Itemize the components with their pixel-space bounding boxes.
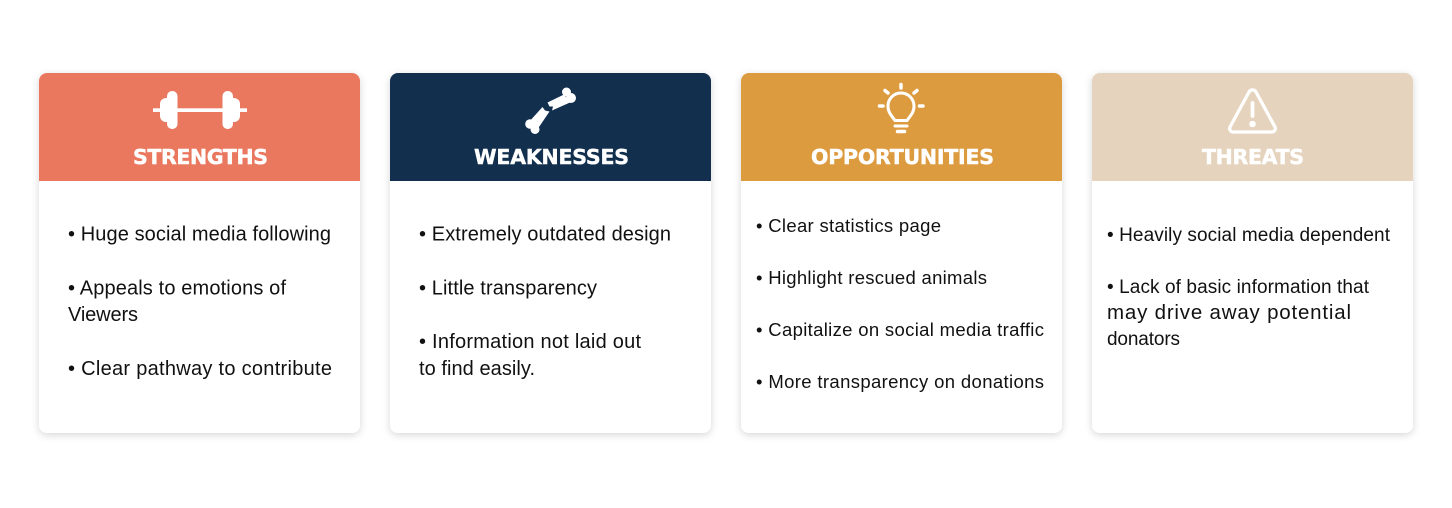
list: threats bbox=[1107, 225, 1391, 350]
list: strengths: • Appeals to emotions of bbox=[68, 278, 286, 300]
list: opportunities: • Highlight rescued animals bbox=[756, 267, 987, 288]
list: weaknesses: • Little transparency bbox=[419, 278, 597, 300]
list: weaknesses: • Information not laid out bbox=[419, 331, 641, 353]
heading: threats: THREATS bbox=[1202, 145, 1304, 169]
list: strengths: • Huge social media following bbox=[68, 224, 331, 246]
list: opportunities: • Clear statistics page bbox=[756, 215, 941, 236]
header: weaknesses bbox=[390, 73, 711, 181]
heading: opportunities: OPPORTUNITIES bbox=[811, 145, 994, 169]
heading: weaknesses: WEAKNESSES bbox=[474, 145, 629, 169]
panel: strengths bbox=[39, 73, 360, 433]
header: opportunities bbox=[741, 73, 1062, 181]
list: threats: may drive away potential bbox=[1107, 301, 1351, 324]
list: threats: • Heavily social media dependent bbox=[1107, 225, 1391, 246]
header: threats bbox=[1092, 73, 1413, 181]
list: strengths: Viewers bbox=[68, 304, 138, 326]
panel: weaknesses bbox=[390, 73, 711, 433]
panel: threats bbox=[1092, 73, 1413, 433]
heading: strengths: STRENGTHS bbox=[133, 145, 268, 169]
panel: opportunities bbox=[741, 73, 1062, 433]
list: weaknesses: • Extremely outdated design bbox=[419, 224, 671, 246]
icon: warning triangle bbox=[1230, 90, 1275, 132]
list: weaknesses: to find easily. bbox=[419, 358, 535, 380]
icon: broken bone bbox=[525, 88, 576, 134]
icon: light bulb bbox=[880, 84, 923, 132]
list: strengths: • Clear pathway to contribute bbox=[68, 358, 332, 380]
icon: barbell bbox=[153, 91, 247, 129]
list: opportunities: • Capitalize on social media traffic bbox=[756, 319, 1044, 340]
list: opportunities bbox=[756, 215, 1044, 392]
list: threats: • Lack of basic information that bbox=[1107, 277, 1370, 298]
list: strengths bbox=[68, 224, 332, 380]
list: opportunities: • More transparency on donations bbox=[756, 371, 1044, 392]
list: threats: donators bbox=[1107, 329, 1180, 350]
list: weaknesses bbox=[419, 224, 671, 380]
header: strengths bbox=[39, 73, 360, 181]
